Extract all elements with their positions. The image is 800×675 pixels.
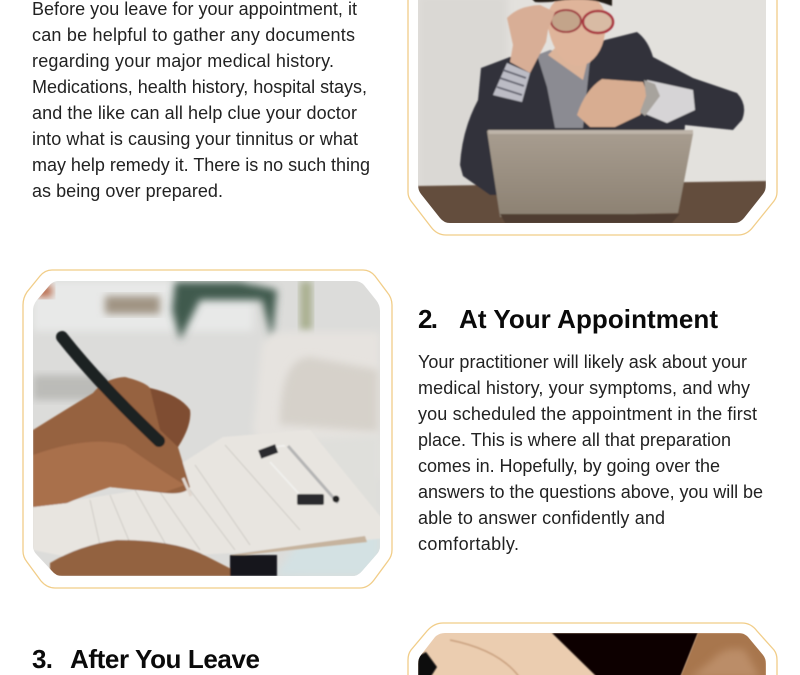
heading: after you leave: After You Leave [70,644,260,674]
text block: prepare documents: may help remedy it. There is no such thing [32,155,370,175]
image: clipboard and pen [33,281,397,576]
image: man with laptop [418,0,766,225]
heading: at your appointment: 2. [418,304,438,334]
frame: photo 1 outline [408,0,777,235]
text block: prepare documents: can be helpful to gather any documents [32,25,355,45]
text block: at your appointment: medical history, your symptoms, and why [418,378,750,398]
text block: prepare documents: Medications, health history, hospital stays, [32,77,367,97]
photo panel: hand writing on clipboard [23,270,397,588]
heading: after you leave: 3. [32,644,53,674]
text block: at your appointment [418,352,763,554]
text block: at your appointment: comfortably. [418,534,519,554]
image: hands [418,633,766,675]
text block: at your appointment: Your practitioner will likely ask about your [418,352,747,372]
text block: at your appointment: you scheduled the appointment in the first [418,404,757,424]
text block: at your appointment: place. This is where all that preparation [418,430,731,450]
text block: prepare documents: as being over prepared. [32,181,223,201]
frame: photo 3 outline [408,623,777,675]
photo panel: man checking watch at laptop [408,0,777,235]
frame: photo 2 outline [23,270,392,588]
text block: at your appointment: answers to the questions above, you will be [418,482,763,502]
photo panel: cropped hands photo [408,623,777,675]
text block: prepare documents: and the like can all help clue your doctor [32,103,357,123]
text block: prepare documents [32,0,370,201]
text block: at your appointment: able to answer confidently and [418,508,665,528]
text block: prepare documents: regarding your major medical history. [32,51,334,71]
text block: at your appointment: comes in. Hopefully, by going over the [418,456,720,476]
text block: prepare documents: into what is causing your tinnitus or what [32,129,358,149]
heading: at your appointment: At Your Appointment [459,304,718,334]
